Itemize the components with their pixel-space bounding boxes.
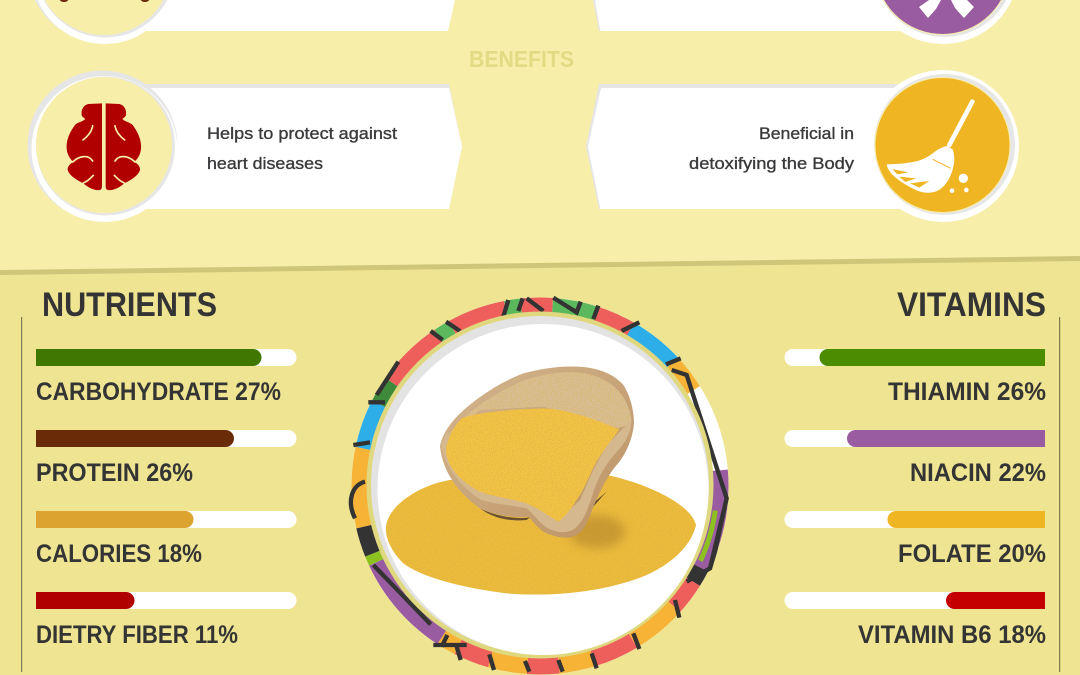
bar: dietry fiber: DIETRY FIBER 11% xyxy=(36,621,238,649)
bar: thiamin: THIAMIN 26% xyxy=(888,378,1046,406)
text: detoxifying: Beneficial in xyxy=(759,124,854,143)
ring dividers xyxy=(351,298,727,672)
inner khaki ring xyxy=(366,312,714,658)
illustration: millet heap xyxy=(386,475,696,595)
bar: niacin xyxy=(784,430,1046,487)
heading: vitamins: VITAMINS xyxy=(897,286,1046,324)
illustration: patterned ring with millet xyxy=(351,298,728,674)
bar: calories xyxy=(36,511,296,568)
illustration: gourd bowl xyxy=(440,367,634,538)
rule: vitamins xyxy=(1059,317,1060,672)
bowl underside shadow xyxy=(480,492,607,520)
bar: dietry fiber xyxy=(36,592,296,649)
white plate xyxy=(371,316,709,655)
section divider xyxy=(0,256,1080,275)
heading: benefits: BENEFITS xyxy=(469,46,574,72)
bowl interior xyxy=(448,372,631,435)
text: detoxifying xyxy=(689,124,855,173)
bowl rim lip xyxy=(441,420,631,532)
panel: top left benefit (cropped) xyxy=(28,0,455,44)
text: heart diseases: Helps to protect against xyxy=(207,124,397,143)
rule: nutrients xyxy=(21,317,22,672)
heading: nutrients: NUTRIENTS xyxy=(42,286,217,324)
bar: calories: CALORIES 18% xyxy=(36,540,202,568)
bowl shell xyxy=(440,367,634,538)
bar: carbohydrate xyxy=(36,349,296,406)
panel: heart diseases benefit xyxy=(28,70,462,222)
panel: detoxifying benefit xyxy=(586,70,1019,222)
bar: protein: PROTEIN 26% xyxy=(36,459,193,487)
bar: niacin: NIACIN 22% xyxy=(910,459,1046,487)
decorative colored ring xyxy=(360,306,720,666)
bar: protein xyxy=(36,430,296,487)
millet in bowl xyxy=(446,408,619,522)
background: benefits section xyxy=(0,0,1080,280)
bar: thiamin xyxy=(784,349,1046,406)
text: heart diseases: heart diseases xyxy=(207,154,323,173)
bar: vitamin b6: VITAMIN B6 18% xyxy=(858,621,1046,649)
icon: brain xyxy=(67,103,141,190)
background: nutrients section xyxy=(0,259,1080,675)
bar chart: nutrients xyxy=(36,349,296,649)
text: detoxifying: detoxifying the Body xyxy=(689,154,855,173)
heap shadow xyxy=(568,515,625,548)
panel: top right benefit (cropped) xyxy=(593,0,1019,44)
bar: folate: FOLATE 20% xyxy=(898,540,1046,568)
text: heart diseases xyxy=(207,124,397,173)
bar: carbohydrate: CARBOHYDRATE 27% xyxy=(36,378,281,406)
bar: vitamin b6 xyxy=(784,592,1046,649)
bar chart: vitamins xyxy=(784,349,1046,649)
icon: broom xyxy=(887,102,972,193)
bar: folate xyxy=(784,511,1046,568)
